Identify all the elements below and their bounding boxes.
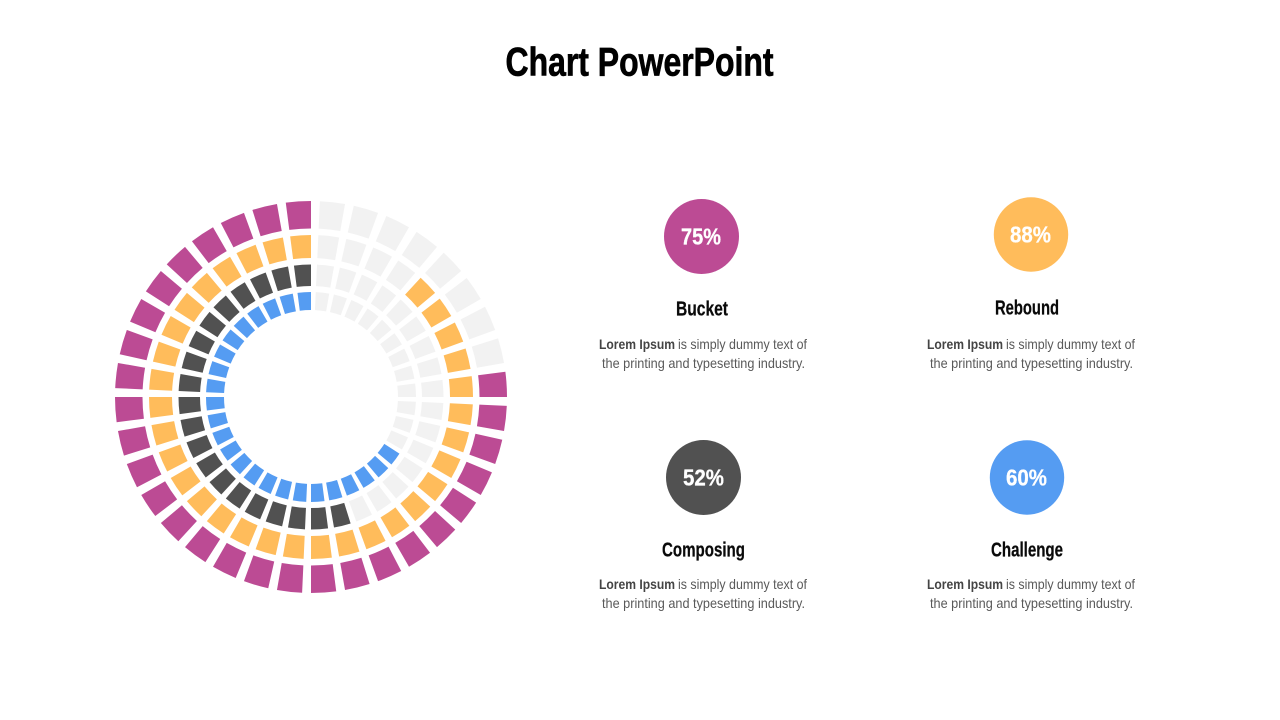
text block: Bucket description: the printing and typesetting industry. [602,355,805,371]
panel: Composing [599,440,807,611]
radial segmented ring chart [114,200,508,594]
text block: Composing description: Lorem Ipsum [599,576,675,592]
blue ring: Challenge 60% [205,292,400,503]
badge: 60% [990,440,1064,515]
title: Chart PowerPoint [506,40,774,84]
grey unfilled segments [313,200,504,522]
text block: Challenge description: is simply dummy text of [1006,576,1135,592]
orange ring: Rebound 88% [148,235,474,560]
heading: Challenge: Challenge [991,540,1063,562]
text block: Composing description: the printing and typesetting industry. [602,595,805,611]
text block: Challenge description: Lorem Ipsum [927,576,1003,592]
badge: 75% [664,199,739,274]
magenta ring: Bucket 75% [114,201,508,594]
dark grey ring: Composing 52% [178,264,351,530]
heading: Rebound: Rebound [995,298,1059,320]
badge: 52%: 52% [683,464,724,490]
text block: Composing description [599,576,807,611]
panel: Rebound [927,197,1135,371]
text block: Challenge description: the printing and typesetting industry. [930,595,1133,611]
heading: Bucket: Bucket [676,298,728,320]
badge: 75%: 75% [681,224,721,250]
badge: 88%: 88% [1010,222,1051,248]
text block: Bucket description [599,336,807,371]
text block: Composing description: is simply dummy text of [678,576,807,592]
badge: 60%: 60% [1006,464,1047,490]
text block: Bucket description: is simply dummy text of [678,336,807,352]
text block: Rebound description: Lorem Ipsum [927,336,1003,352]
text block: Rebound description [927,336,1135,371]
text block: Rebound description: is simply dummy text of [1006,336,1135,352]
badge: 52% [666,440,741,515]
heading: Composing: Composing [662,540,745,562]
text block: Bucket description: Lorem Ipsum [599,336,675,352]
badge: 88% [994,197,1068,272]
text block: Rebound description: the printing and typesetting industry. [930,355,1133,371]
text block: Challenge description [927,576,1135,611]
panel: Challenge [927,440,1135,611]
panel: Bucket [599,199,807,371]
